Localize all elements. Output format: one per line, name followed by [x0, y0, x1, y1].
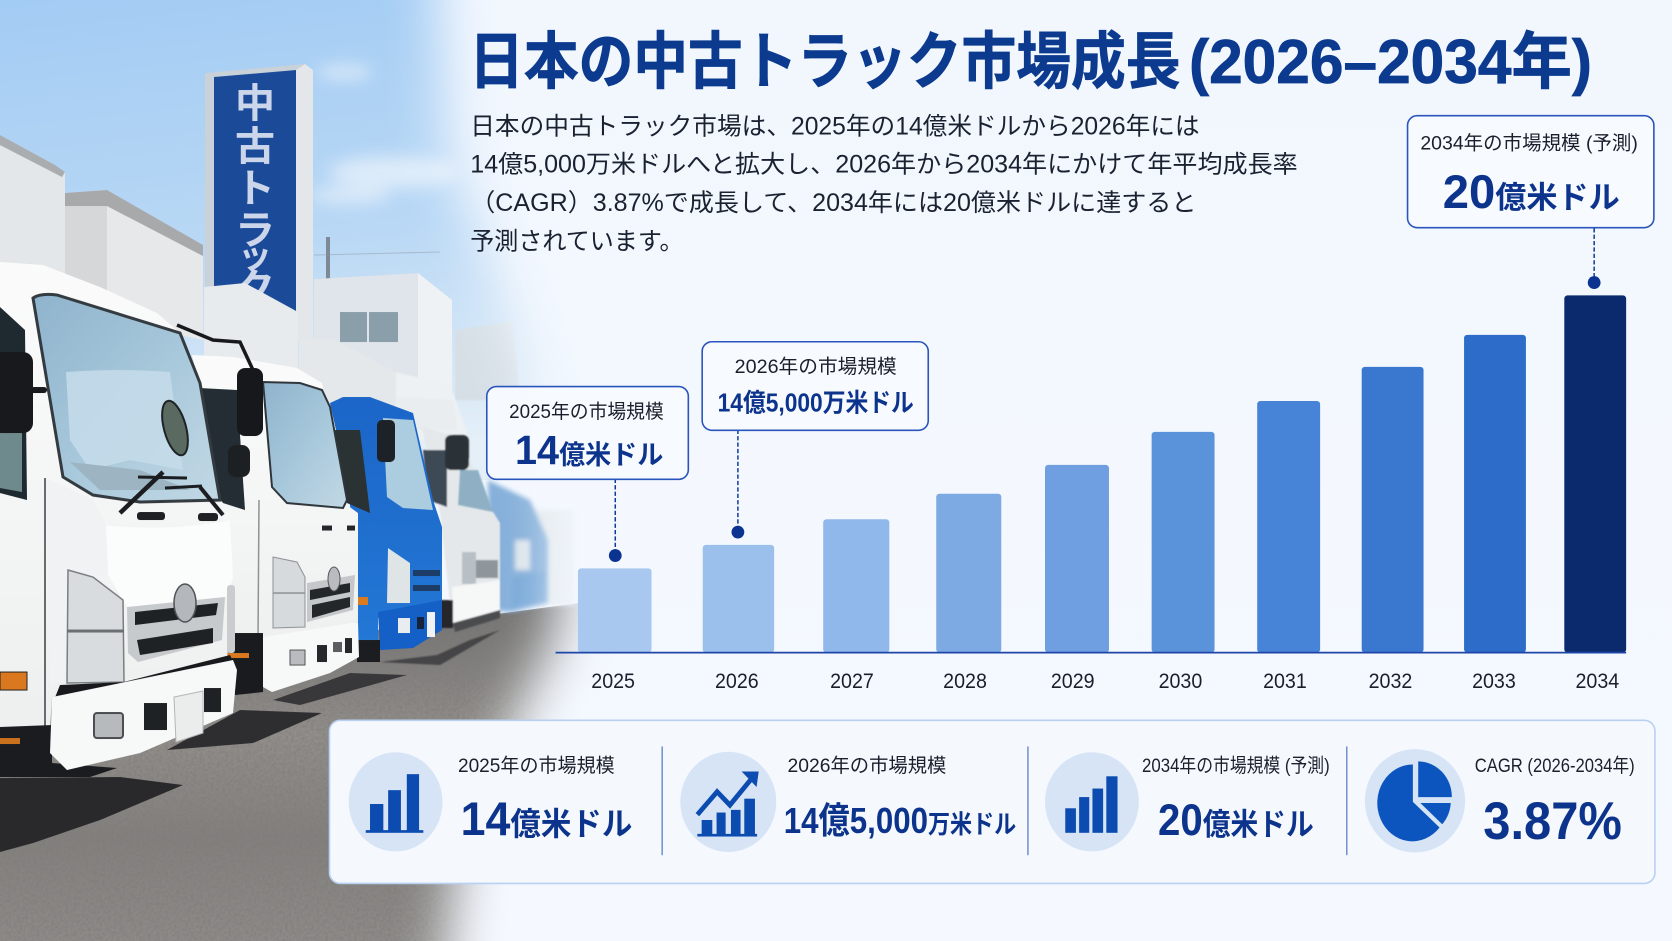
- truck 6 far white: [536, 510, 575, 608]
- metric: 2026: [680, 752, 1016, 852]
- bar 2034: [1564, 295, 1626, 653]
- lower dark intake: [56, 655, 232, 696]
- truck 4 white: [422, 428, 501, 632]
- year labels: [591, 669, 1619, 693]
- year labels: 2029: [1051, 669, 1095, 693]
- side panel: [103, 525, 108, 566]
- year labels: 2031: [1263, 669, 1307, 693]
- wipers: [120, 472, 223, 515]
- hood handles: [137, 512, 218, 521]
- clouds: [310, 65, 461, 203]
- year labels: 2027: [830, 669, 874, 693]
- callout: 2034: [1408, 116, 1654, 289]
- metric: 2034: 2034年の市場規模 (予測): [1142, 755, 1330, 777]
- side marker light: [227, 585, 235, 653]
- bar chart: [556, 295, 1626, 693]
- cargo boxes: [0, 135, 470, 440]
- truck 2 white: [192, 355, 359, 695]
- callout: 2025: 2025年の市場規模: [509, 401, 664, 423]
- bar 2033: [1464, 335, 1526, 653]
- bar 2027: [823, 519, 889, 653]
- sky: [0, 0, 543, 480]
- utility pole and wires: [314, 237, 440, 278]
- truck 1 white: [0, 262, 263, 777]
- bar 2032: [1362, 367, 1424, 653]
- ground: [0, 603, 584, 941]
- dark chassis: [0, 725, 117, 777]
- callout: 2025: [487, 387, 688, 562]
- callout: 2034: 20億米ドル: [1443, 166, 1620, 218]
- sign board: ト: [235, 167, 275, 211]
- sign board: 中: [235, 82, 275, 126]
- reflected mirror: [161, 400, 189, 456]
- axis: [556, 652, 1626, 654]
- metric: 2034: [1045, 752, 1330, 851]
- side window: [0, 307, 27, 500]
- emblem: [174, 584, 196, 622]
- distant buildings: [314, 273, 520, 400]
- windshield: [33, 294, 220, 502]
- callout: 2026: 14億5,000万米ドル: [718, 389, 914, 418]
- grille: [127, 597, 225, 662]
- sign board: ク: [235, 267, 275, 311]
- metric: 2025: [349, 752, 632, 851]
- door seam: [44, 478, 46, 727]
- metric: 2026: 14億5,000万米ドル: [784, 800, 1016, 841]
- year labels: 2034: [1575, 669, 1619, 693]
- callout: 2026: [702, 342, 928, 538]
- bar 2025: [578, 568, 652, 653]
- year labels: 2026: [715, 669, 759, 693]
- bar 2028: [936, 494, 1001, 653]
- truck 3 blue: [330, 397, 442, 662]
- metric: 2034: 20億米ドル: [1158, 795, 1314, 845]
- metric: CAGR: [1365, 749, 1635, 853]
- icon: growth chart with arrow: [680, 752, 776, 852]
- title: (2026–2034年): [1189, 28, 1592, 97]
- title: 日本の中古トラック市場成長: [469, 28, 1180, 97]
- photo: row of used trucks: [0, 0, 640, 941]
- sign board: ラ: [235, 209, 275, 253]
- metric: CAGR: CAGR (2026-2034年): [1475, 755, 1635, 777]
- truck shadows: [0, 630, 500, 852]
- bar 2029: [1045, 465, 1109, 653]
- year labels: 2032: [1369, 669, 1412, 693]
- bar 2030: [1152, 432, 1215, 653]
- year labels: 2030: [1159, 669, 1202, 693]
- icon: rising bars: [1045, 752, 1139, 851]
- year labels: 2028: [943, 669, 987, 693]
- year labels: 2025: [591, 669, 635, 693]
- cab body: [0, 262, 233, 728]
- metric: 2025: 14億米ドル: [461, 793, 632, 845]
- bar 2031: [1257, 401, 1320, 653]
- right mirror and arm: [177, 325, 263, 436]
- callout: 2025: 14億米ドル: [515, 427, 663, 473]
- intro paragraph: 日本の中古トラック市場は、2025年の14億米ドルから2026年には: [470, 112, 1200, 140]
- sign board: [205, 64, 313, 340]
- bar 2026: [703, 545, 774, 653]
- intro paragraph: 予測されています。: [470, 228, 684, 256]
- icon: pie chart: [1365, 749, 1465, 853]
- intro paragraph: 14億5,000万米ドルへと拡大し、2026年から2034年にかけて年平均成長率: [470, 151, 1298, 179]
- reflection in glass: [66, 370, 183, 470]
- callout: 2026: 2026年の市場規模: [735, 356, 897, 378]
- headlamp: [67, 570, 124, 683]
- intro paragraph: （CAGR）3.87%で成長して、2034年には20億米ドルに達すると: [470, 189, 1196, 217]
- metric: 2025: 2025年の市場規模: [458, 755, 615, 777]
- metric: CAGR: 3.87%: [1483, 792, 1622, 851]
- metric: 2026: 2026年の市場規模: [787, 755, 946, 777]
- intro paragraph: [470, 112, 1298, 256]
- turn lamp: [0, 672, 27, 690]
- year labels: 2033: [1472, 669, 1516, 693]
- panel: key metrics: [329, 720, 1655, 883]
- left mirror: [0, 352, 47, 433]
- bumper: [50, 660, 237, 770]
- sign board: ッ: [238, 238, 272, 276]
- front panel: [108, 550, 232, 607]
- truck 5 far blue: [488, 480, 548, 612]
- sign board: 古: [235, 125, 275, 169]
- icon: bar chart: [349, 752, 443, 851]
- callout: 2034: 2034年の市場規模 (予測): [1420, 132, 1638, 154]
